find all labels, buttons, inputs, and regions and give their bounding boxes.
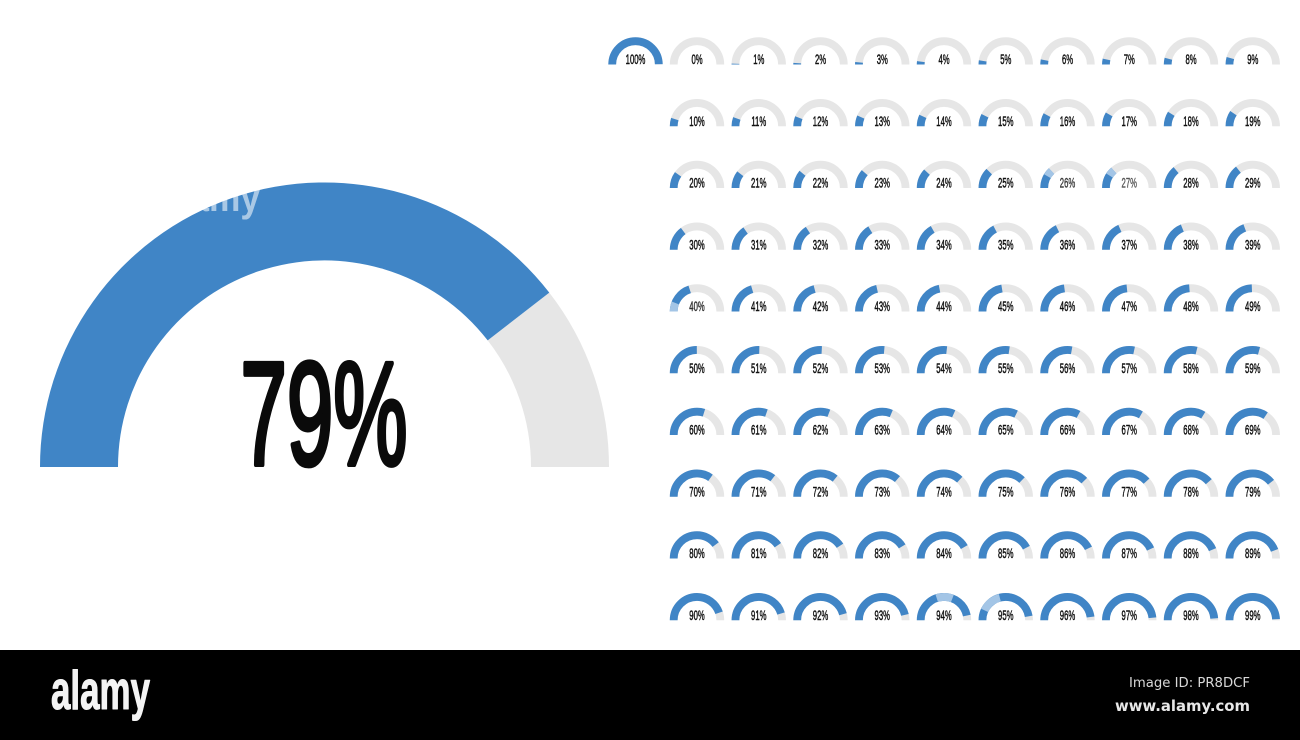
gauge: 6%: 6% <box>1062 53 1073 68</box>
gauge: 20%: 20% <box>689 176 705 191</box>
gauge: 4% <box>921 41 967 68</box>
gauge: 5% <box>982 41 1029 68</box>
gauge: 64% <box>921 412 967 438</box>
gauge: 31%: 31% <box>751 238 767 253</box>
gauge: 26%: 26% <box>1060 176 1075 191</box>
gauge: 98%: 98% <box>1183 609 1199 623</box>
gauge: 23% <box>859 165 906 191</box>
gauge: 18% <box>1168 103 1214 129</box>
gauge: 8% <box>1168 41 1214 68</box>
gauge: 10% <box>674 103 720 129</box>
gauge: 81%: 81% <box>751 547 767 562</box>
gauge: 47%: 47% <box>1122 300 1137 315</box>
gauge: 7% <box>1106 41 1153 68</box>
gauge: 80% <box>674 535 720 562</box>
gauge: 2% <box>797 41 844 68</box>
gauge: 69%: 69% <box>1245 423 1261 438</box>
gauge: 73%: 73% <box>875 485 890 500</box>
gauge: 11% <box>735 103 782 129</box>
gauge: 67%: 67% <box>1122 423 1137 438</box>
gauge: 95% <box>982 597 1029 623</box>
gauge: 20% <box>674 165 720 191</box>
gauge: 73% <box>859 473 906 500</box>
gauge: 14% <box>921 103 967 129</box>
gauge: 65% <box>982 412 1029 438</box>
gauge: 98% <box>1168 597 1214 623</box>
gauge: 45% <box>982 288 1029 315</box>
gauge: 93%: 93% <box>875 609 890 623</box>
gauge: 97%: 97% <box>1122 609 1137 623</box>
gauge: 2%: 2% <box>815 53 826 68</box>
gauge: 59%: 59% <box>1245 362 1261 376</box>
gauge: 3% <box>859 41 906 68</box>
gauge: 93% <box>859 597 906 623</box>
gauge: 76%: 76% <box>1060 485 1075 500</box>
gauge: 94%: 94% <box>936 609 952 623</box>
gauge: 57% <box>1106 350 1153 376</box>
gauge: 21% <box>735 165 782 191</box>
gauge: 35%: 35% <box>998 238 1014 253</box>
gauge: 17%: 17% <box>1122 115 1137 129</box>
gauge: 38%: 38% <box>1183 238 1199 253</box>
gauge: 51%: 51% <box>751 362 767 376</box>
gauge: 8%: 8% <box>1185 53 1197 68</box>
gauge: 79% <box>1229 473 1276 500</box>
gauge: 26% <box>1044 165 1091 191</box>
gauge: 86%: 86% <box>1060 547 1075 562</box>
gauge: 19%: 19% <box>1245 115 1261 129</box>
gauge: 68%: 68% <box>1183 423 1199 438</box>
gauge: 82%: 82% <box>813 547 828 562</box>
gauge: 78%: 78% <box>1183 485 1199 500</box>
gauge: 1% <box>735 41 782 68</box>
gauge: 99%: 99% <box>1245 609 1261 623</box>
gauge: 70% <box>674 473 720 500</box>
gauge: 9%: 9% <box>1247 53 1258 68</box>
gauge: 75% <box>982 473 1029 500</box>
gauge: 94% <box>921 597 967 623</box>
gauge: 13% <box>859 103 906 129</box>
gauge: 48%: 48% <box>1183 300 1199 315</box>
gauge: 50% <box>674 350 720 376</box>
gauge: 12%: 12% <box>813 115 828 129</box>
gauge: 63% <box>859 412 906 438</box>
gauge: 17% <box>1106 103 1153 129</box>
gauge: 43% <box>859 288 906 315</box>
website: www.alamy.com <box>1115 697 1250 715</box>
gauge: 100%: 100% <box>626 53 645 68</box>
gauge: 61%: 61% <box>751 423 767 438</box>
gauge: 56% <box>1044 350 1091 376</box>
gauge: 41%: 41% <box>751 300 767 315</box>
gauge: 28%: 28% <box>1183 176 1199 191</box>
gauge: 48% <box>1168 288 1214 315</box>
gauge: 72% <box>797 473 844 500</box>
gauge: 0% <box>674 41 720 68</box>
gauge: 58% <box>1168 350 1214 376</box>
gauge: 6% <box>1044 41 1091 68</box>
gauge: 49% <box>1229 288 1276 315</box>
gauge: 96%: 96% <box>1060 609 1075 623</box>
gauge: 38% <box>1168 226 1214 253</box>
image id: Image ID: PR8DCF <box>1129 676 1250 691</box>
gauge: 83%: 83% <box>875 547 890 562</box>
gauge: 59% <box>1229 350 1276 376</box>
gauge: 69% <box>1229 412 1276 438</box>
gauge: 25% <box>982 165 1029 191</box>
gauge: 89% <box>1229 535 1276 562</box>
gauge: 18%: 18% <box>1183 115 1199 129</box>
gauge: 62% <box>797 412 844 438</box>
gauge: 22%: 22% <box>813 176 828 191</box>
gauge: 80%: 80% <box>689 547 705 562</box>
gauge: 30% <box>674 226 720 253</box>
gauge: 53%: 53% <box>875 362 890 376</box>
gauge: 82% <box>797 535 844 562</box>
gauge: 39% <box>1229 226 1276 253</box>
gauge: 29% <box>1229 165 1276 191</box>
gauge: 91%: 91% <box>751 609 767 623</box>
gauge: 15%: 15% <box>998 115 1014 129</box>
logo: alamy: alamy <box>51 659 150 721</box>
gauge: 54% <box>921 350 967 376</box>
gauge: 63%: 63% <box>875 423 890 438</box>
gauge: 53% <box>859 350 906 376</box>
gauge: 30%: 30% <box>689 238 705 253</box>
gauge: 100% <box>612 41 659 68</box>
gauge: 24%: 24% <box>936 176 952 191</box>
gauge: 68% <box>1168 412 1214 438</box>
gauge: 29%: 29% <box>1245 176 1261 191</box>
gauge: 85% <box>982 535 1029 562</box>
gauge: 24% <box>921 165 967 191</box>
gauge: 96% <box>1044 597 1091 623</box>
gauge: 99% <box>1229 597 1276 623</box>
gauge filled arc <box>40 182 549 467</box>
gauge: 0%: 0% <box>691 53 703 68</box>
gauge: 12% <box>797 103 844 129</box>
gauge: 75%: 75% <box>998 485 1014 500</box>
gauge: 19% <box>1229 103 1276 129</box>
gauge: 72%: 72% <box>813 485 828 500</box>
gauge: 42% <box>797 288 844 315</box>
gauge: 40%: 40% <box>689 300 705 315</box>
gauge: 87% <box>1106 535 1153 562</box>
gauge: 83% <box>859 535 906 562</box>
gauge: 89%: 89% <box>1245 547 1261 562</box>
gauge: 61% <box>735 412 782 438</box>
gauge: 5%: 5% <box>1000 53 1011 68</box>
gauge: 74%: 74% <box>936 485 952 500</box>
gauge: 58%: 58% <box>1183 362 1199 376</box>
gauge: 78% <box>1168 473 1214 500</box>
gauge: 71%: 71% <box>751 485 767 500</box>
gauge: 95%: 95% <box>998 609 1014 623</box>
gauge: 60%: 60% <box>689 423 705 438</box>
gauge: 57%: 57% <box>1122 362 1137 376</box>
gauge: 36% <box>1044 226 1091 253</box>
gauge: 25%: 25% <box>998 176 1014 191</box>
gauge: 97% <box>1106 597 1153 623</box>
gauge: 64%: 64% <box>936 423 952 438</box>
gauge: 87%: 87% <box>1122 547 1137 562</box>
gauge: 21%: 21% <box>751 176 767 191</box>
gauge: 84% <box>921 535 967 562</box>
gauge: 74% <box>921 473 967 500</box>
gauge: 66%: 66% <box>1060 423 1075 438</box>
gauge: 54%: 54% <box>936 362 952 376</box>
gauge: 11%: 11% <box>751 115 766 129</box>
gauge: 10%: 10% <box>689 115 705 129</box>
gauge remainder <box>488 293 609 467</box>
gauge: 47% <box>1106 288 1153 315</box>
gauge: 22% <box>797 165 844 191</box>
gauge: 88%: 88% <box>1183 547 1199 562</box>
gauge: 66% <box>1044 412 1091 438</box>
gauge: 92%: 92% <box>813 609 828 623</box>
gauge: 81% <box>735 535 782 562</box>
gauge: 84%: 84% <box>936 547 952 562</box>
gauge: 86% <box>1044 535 1091 562</box>
large gauge: 79% <box>40 176 609 496</box>
gauge: 27%: 27% <box>1122 176 1137 191</box>
gauge: 42%: 42% <box>813 300 828 315</box>
gauge: 79%: 79% <box>1245 485 1261 500</box>
gauge: 46% <box>1044 288 1091 315</box>
gauge: 32% <box>797 226 844 253</box>
footer bar <box>0 650 1300 740</box>
gauge: 33%: 33% <box>875 238 890 253</box>
gauge: 92% <box>797 597 844 623</box>
gauge: 60% <box>674 412 720 438</box>
gauge: 44%: 44% <box>936 300 952 315</box>
gauge: 37%: 37% <box>1122 238 1137 253</box>
gauge: 41% <box>735 288 782 315</box>
gauge: 15% <box>982 103 1029 129</box>
gauge: 16%: 16% <box>1060 115 1075 129</box>
gauge: 31% <box>735 226 782 253</box>
gauge: 13%: 13% <box>875 115 890 129</box>
gauge: 16% <box>1044 103 1091 129</box>
gauge: 44% <box>921 288 967 315</box>
gauge: 37% <box>1106 226 1153 253</box>
gauge: 33% <box>859 226 906 253</box>
gauge: 43%: 43% <box>875 300 890 315</box>
gauge: 46%: 46% <box>1060 300 1075 315</box>
gauge: 71% <box>735 473 782 500</box>
gauge: 52% <box>797 350 844 376</box>
gauge: 9% <box>1229 41 1276 68</box>
gauge: 34%: 34% <box>936 238 952 253</box>
gauge: 35% <box>982 226 1029 253</box>
gauge: 62%: 62% <box>813 423 828 438</box>
gauge: 23%: 23% <box>875 176 890 191</box>
gauge: 7%: 7% <box>1124 53 1135 68</box>
large percentage value: 79% <box>240 332 408 496</box>
gauge: 90% <box>674 597 720 623</box>
gauge: 76% <box>1044 473 1091 500</box>
gauge: 1%: 1% <box>753 53 764 68</box>
gauge: 32%: 32% <box>813 238 828 253</box>
gauge: 77%: 77% <box>1122 485 1137 500</box>
footer background <box>0 650 1300 740</box>
gauge: 40% <box>674 288 720 315</box>
gauge: 91% <box>735 597 782 623</box>
gauge: 67% <box>1106 412 1153 438</box>
gauge: 39%: 39% <box>1245 238 1261 253</box>
gauge: 52%: 52% <box>813 362 828 376</box>
small gauge set <box>612 41 1276 623</box>
gauge: 70%: 70% <box>689 485 705 500</box>
gauge: 34% <box>921 226 967 253</box>
gauge: 55%: 55% <box>998 362 1014 376</box>
gauge: 3%: 3% <box>877 53 888 68</box>
gauge: 90%: 90% <box>689 609 705 623</box>
gauge: 45%: 45% <box>998 300 1014 315</box>
gauge: 4%: 4% <box>938 53 950 68</box>
gauge: 55% <box>982 350 1029 376</box>
gauge: 51% <box>735 350 782 376</box>
gauge: 14%: 14% <box>936 115 952 129</box>
gauge: 27% <box>1106 165 1153 191</box>
watermark on arc: alamy <box>160 176 261 220</box>
gauge: 36%: 36% <box>1060 238 1075 253</box>
gauge: 77% <box>1106 473 1153 500</box>
gauge: 49%: 49% <box>1245 300 1261 315</box>
gauge: 85%: 85% <box>998 547 1014 562</box>
gauge: 56%: 56% <box>1060 362 1075 376</box>
gauge: 50%: 50% <box>689 362 705 376</box>
gauge: 88% <box>1168 535 1214 562</box>
gauge: 28% <box>1168 165 1214 191</box>
gauge: 65%: 65% <box>998 423 1014 438</box>
